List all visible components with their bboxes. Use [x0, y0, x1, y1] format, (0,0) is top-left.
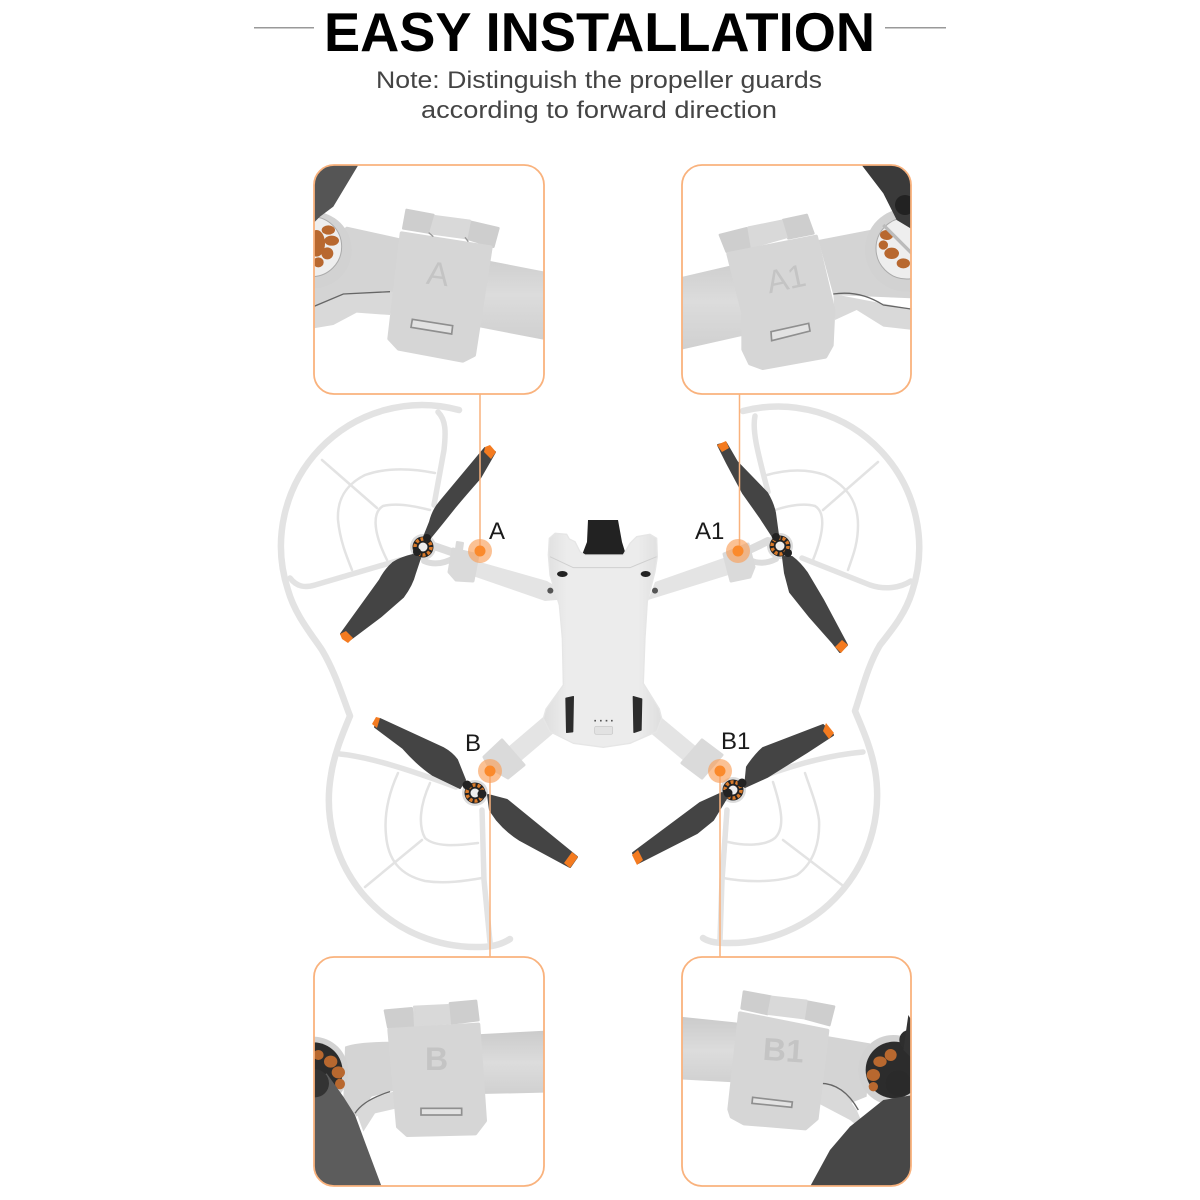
- connector line A: [479, 394, 481, 551]
- propeller A: [340, 445, 496, 643]
- panel B1 border: [682, 957, 911, 1186]
- panel B1: [680, 957, 928, 1187]
- motor B: [462, 780, 488, 806]
- propeller guard: right side: [703, 407, 919, 943]
- label A1: A1: [695, 518, 724, 545]
- marker A1: [726, 539, 750, 563]
- marker A: [468, 539, 492, 563]
- motor B1: [720, 777, 746, 803]
- panel B border: [314, 957, 544, 1186]
- drone body: [543, 533, 662, 747]
- clamp letter B: B: [425, 1041, 448, 1077]
- clamp B: [484, 740, 524, 778]
- title rule left: [254, 27, 314, 28]
- connector line B: [489, 771, 491, 957]
- propeller A1: [717, 441, 848, 653]
- marker B: [478, 759, 502, 783]
- propeller B1: [632, 723, 834, 865]
- front arm right: [648, 541, 776, 600]
- note text: according to forward direction: [421, 97, 777, 124]
- clamp B1: [682, 740, 722, 778]
- front arm left: [424, 546, 557, 601]
- panel A border: [314, 165, 544, 394]
- panel B: [313, 956, 545, 1187]
- motor A: [410, 534, 436, 560]
- clamp letter B1: B1: [762, 1031, 805, 1070]
- label A: A: [489, 518, 505, 545]
- clamp A: [449, 542, 478, 581]
- connector line A1: [738, 394, 740, 551]
- panel A1: [681, 164, 912, 395]
- marker B1: [708, 759, 732, 783]
- rear arm right: [652, 722, 700, 762]
- clamp letter A: A: [425, 254, 451, 293]
- panel A: [313, 164, 545, 395]
- label B: B: [465, 730, 481, 757]
- title rule right: [885, 27, 946, 28]
- connector line B1: [719, 771, 721, 957]
- drone camera: [582, 520, 626, 555]
- label B1: B1: [721, 728, 750, 755]
- propeller guard: left side: [281, 405, 510, 947]
- drone: [424, 520, 776, 778]
- rear arm left: [505, 722, 552, 762]
- note text: Note: Distinguish the propeller guards: [376, 67, 822, 94]
- clamp letter A1: A1: [763, 257, 809, 300]
- title: EASY INSTALLATION: [324, 1, 875, 63]
- panel A1 border: [682, 165, 911, 394]
- motor A1: [767, 533, 793, 559]
- clamp A1: [724, 544, 754, 581]
- note text: [376, 67, 822, 124]
- propeller B: [372, 717, 578, 868]
